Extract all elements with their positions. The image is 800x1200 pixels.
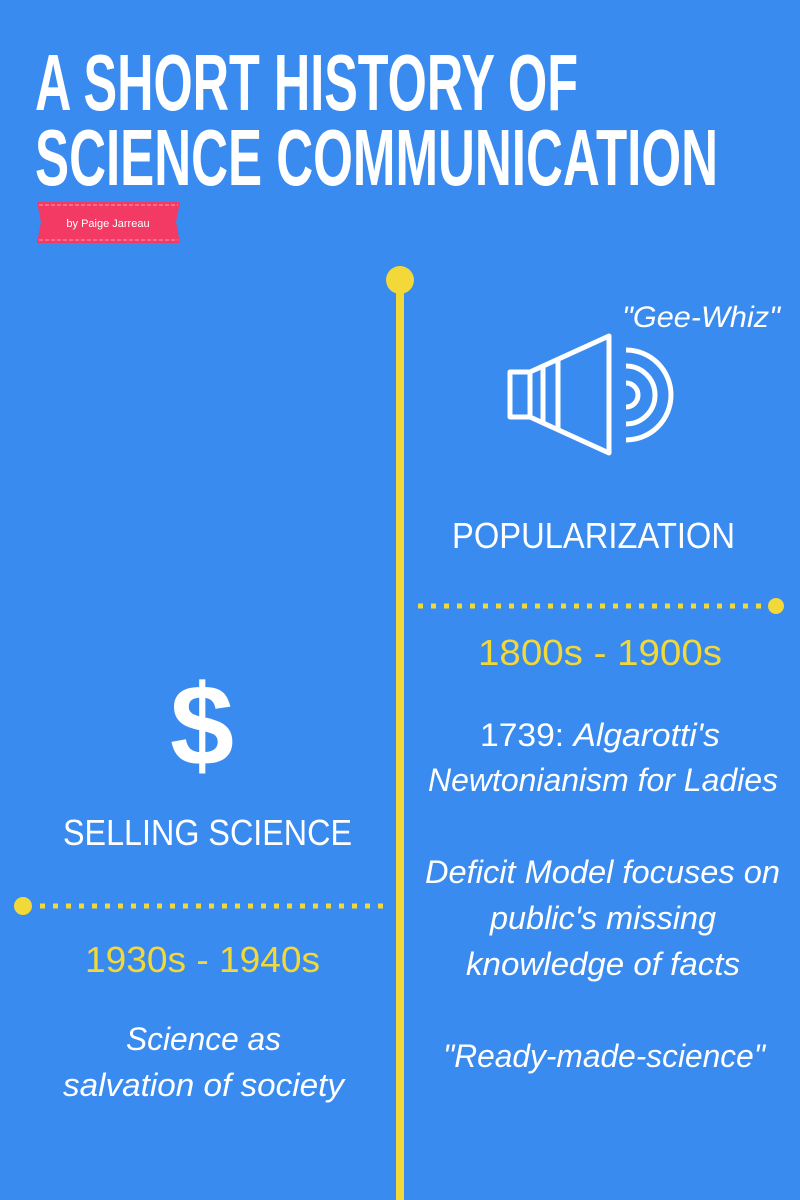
heading: popularization: POPULARIZATION (452, 515, 735, 556)
text block: popularization details: "Ready-made-science" (443, 1038, 767, 1074)
icon: dollar: $ (170, 662, 234, 790)
text block: popularization details (425, 717, 780, 1074)
icon: speaker (510, 336, 671, 453)
text block: selling science details (63, 1021, 346, 1103)
heading: selling science: SELLING SCIENCE (63, 812, 352, 853)
text block: popularization details: knowledge of facts (466, 946, 740, 982)
connector right (418, 598, 784, 614)
text block: popularization details: public's missing (489, 900, 716, 936)
text block: popularization details: Deficit Model focuses on (425, 854, 780, 890)
text block: popularization details: 1739: Algarotti's (480, 717, 720, 753)
era: 1930s: 1930s - 1940s (85, 939, 320, 980)
author ribbon: by Paige Jarreau (66, 218, 150, 230)
text block: selling science details: Science as (126, 1021, 281, 1057)
timeline axis (386, 266, 414, 1200)
gee-whiz quote: "Gee-Whiz" (622, 301, 781, 334)
author ribbon (37, 202, 180, 243)
era: 1800s: 1800s - 1900s (478, 632, 722, 673)
text block: popularization details: Newtonianism for Ladies (428, 762, 778, 798)
title (35, 38, 718, 202)
connector left (14, 897, 385, 915)
text block: selling science details: salvation of society (63, 1067, 346, 1103)
